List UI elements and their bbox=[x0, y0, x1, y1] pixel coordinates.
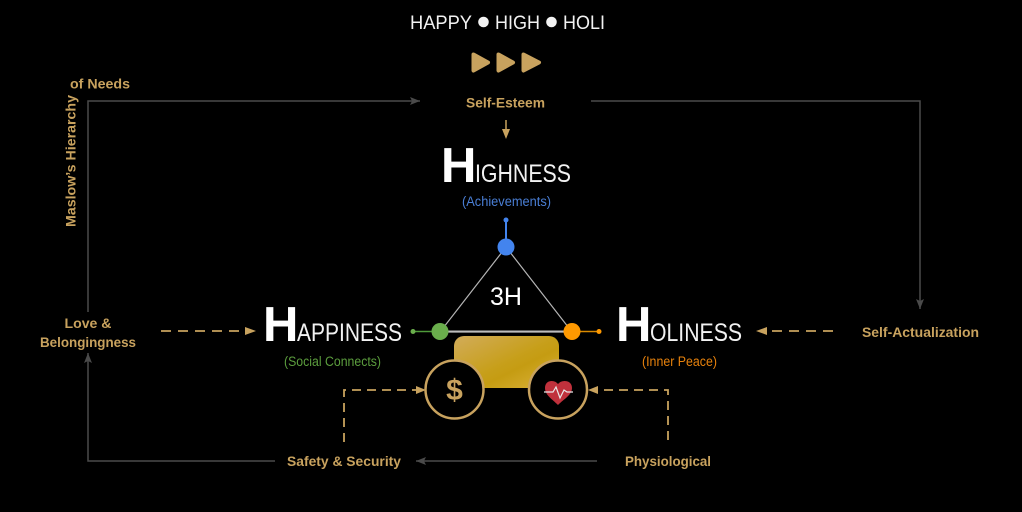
label: Inner Peace: (Inner Peace) bbox=[642, 354, 717, 369]
icon: dollar coin: $ bbox=[446, 374, 463, 407]
arrow: Maslow cycle bbox=[88, 101, 920, 461]
label: Self-Actualization: Self-Actualization bbox=[862, 324, 979, 340]
title: HAPPY bbox=[410, 13, 472, 34]
heading: Highness: H bbox=[441, 139, 476, 193]
arrow: dashed Physiological to heart bbox=[588, 386, 668, 440]
heading: Holiness: H bbox=[616, 298, 651, 352]
arrow: dashed to Holiness bbox=[756, 327, 833, 335]
label: Social Connects: (Social Connects) bbox=[284, 354, 381, 369]
label: Love & Belongingness: Love & bbox=[64, 315, 112, 331]
heading: Maslow's Hierarchy: Maslow’s Hierarchy bbox=[62, 95, 78, 227]
icon: dollar coin bbox=[426, 360, 484, 418]
arrow: dashed Safety to dollar bbox=[344, 386, 426, 442]
arrow: Self-Esteem to Highness bbox=[502, 120, 510, 139]
label: Physiological: Physiological bbox=[625, 453, 711, 469]
label: Safety & Security: Safety & Security bbox=[287, 453, 401, 469]
triangle 3H bbox=[410, 218, 602, 340]
title: HIGH bbox=[495, 13, 540, 34]
label: Love & Belongingness: Belongingness bbox=[40, 334, 136, 350]
heading: Happiness: H bbox=[263, 298, 298, 352]
label: Self-Esteem: Self-Esteem bbox=[466, 94, 545, 110]
panel: gold base bbox=[454, 336, 559, 388]
arrow: dashed to Happiness bbox=[161, 327, 256, 335]
title: HOLI bbox=[563, 13, 605, 34]
icon: heart bbox=[529, 360, 587, 418]
triangle 3H: 3H bbox=[490, 283, 522, 311]
heading: of Needs: of Needs bbox=[70, 76, 130, 92]
heading: Holiness remainder: OLINESS bbox=[650, 319, 742, 347]
heading: Happiness remainder: APPINESS bbox=[297, 319, 402, 347]
heading: Highness remainder: IGHNESS bbox=[475, 160, 571, 188]
label: Achievements: (Achievements) bbox=[462, 194, 551, 209]
label: Love & Belongingness bbox=[40, 315, 136, 350]
icon: three play arrows bbox=[474, 54, 539, 70]
title bbox=[410, 13, 605, 34]
